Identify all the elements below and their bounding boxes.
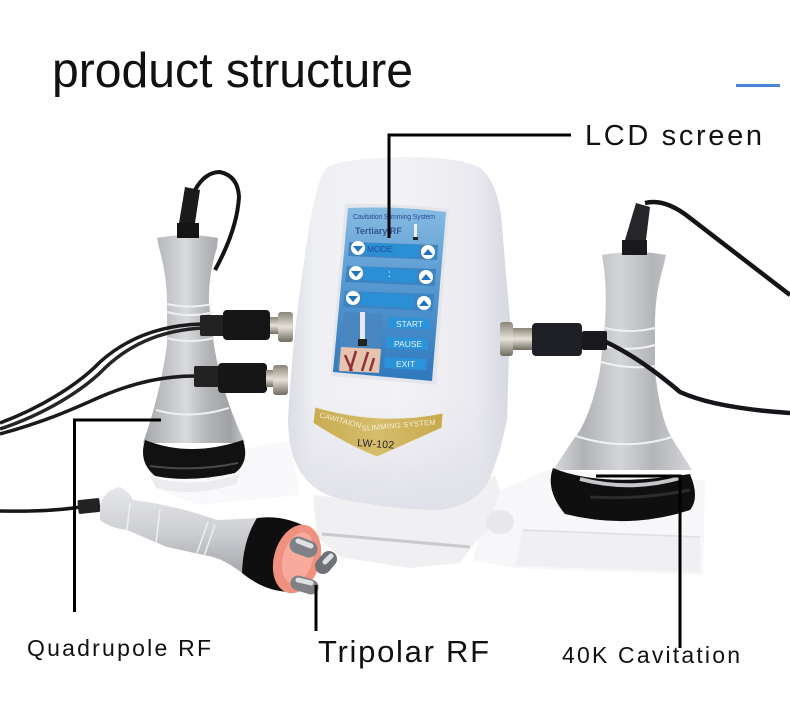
screen buttons: EXIT bbox=[396, 359, 415, 369]
left handle body bbox=[143, 235, 245, 443]
wand pink face bbox=[265, 519, 329, 599]
LCD screen: Tertiary RF bbox=[355, 226, 402, 236]
cables and connectors on the left bbox=[0, 310, 293, 434]
screen buttons: START bbox=[396, 319, 423, 329]
gold label: CAWITAION bbox=[318, 410, 362, 430]
screen buttons bbox=[384, 317, 430, 370]
unit body bbox=[288, 157, 510, 510]
right handle body bbox=[553, 252, 692, 470]
LCD screen: : bbox=[388, 269, 391, 280]
lower connector bbox=[194, 366, 219, 387]
screen arrow buttons bbox=[346, 241, 435, 310]
leader line: Quadrupole RF bbox=[74, 420, 161, 612]
gold label: LW-102 bbox=[357, 437, 395, 452]
top connector and cord bbox=[622, 240, 647, 255]
right handle black band bbox=[551, 468, 695, 521]
LCD screen bbox=[330, 204, 449, 385]
label: Tripolar RF: Tripolar RF bbox=[318, 634, 489, 669]
upper connector bbox=[200, 315, 224, 336]
leader line: Tripolar RF bbox=[314, 585, 318, 631]
side connector bbox=[500, 322, 513, 356]
gold label: SLIMMING SYSTEM bbox=[361, 418, 436, 433]
label: 40K Cavitation: 40K Cavitation bbox=[562, 642, 740, 668]
left handle: quadrupole RF bbox=[143, 172, 245, 492]
screen control bands bbox=[343, 242, 438, 311]
screen control rows bbox=[361, 243, 419, 309]
LCD screen: MODE: bbox=[367, 244, 395, 254]
top connector and cord bbox=[177, 223, 199, 238]
label: Quadrupole RF: Quadrupole RF bbox=[27, 635, 211, 661]
blue accent bar bbox=[736, 84, 780, 87]
label: LCD screen: LCD screen bbox=[585, 120, 762, 152]
unit lower shading bbox=[288, 400, 509, 510]
LCD screen: Cavitation Slimming System bbox=[353, 214, 435, 221]
transparent base plate bbox=[150, 440, 705, 575]
gold label bbox=[313, 407, 443, 457]
wand black collar bbox=[242, 517, 312, 592]
tripolar RF wand bbox=[0, 487, 331, 599]
electrode highlights bbox=[298, 541, 331, 583]
left handle black band bbox=[143, 440, 245, 479]
screen skin illustration bbox=[339, 312, 381, 373]
wand handle bbox=[100, 487, 262, 575]
wand electrodes bbox=[298, 545, 329, 587]
title: product structure bbox=[52, 44, 413, 98]
leader line: LCD screen bbox=[389, 135, 571, 238]
leader line: 40K Cavitation bbox=[596, 476, 680, 648]
screen lower panel bbox=[337, 312, 382, 372]
right handle: 40K cavitation bbox=[500, 202, 790, 521]
device: main unit bbox=[288, 157, 510, 510]
screen buttons: PAUSE bbox=[394, 339, 423, 349]
